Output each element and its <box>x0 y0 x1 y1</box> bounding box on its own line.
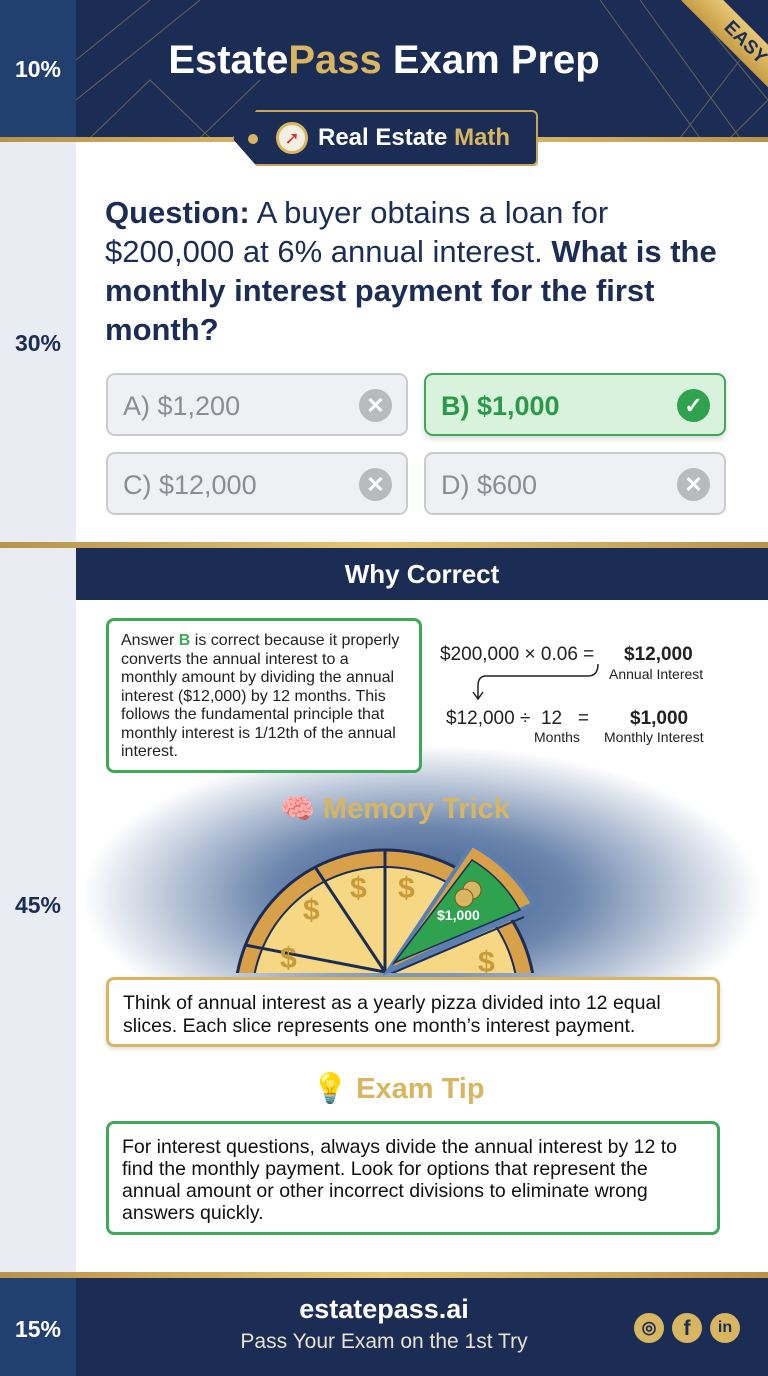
answer options <box>106 373 408 436</box>
icon: compass <box>276 122 308 154</box>
formula: Months <box>534 729 580 745</box>
pizza chart: $ <box>350 872 367 905</box>
tip box <box>106 1121 720 1235</box>
social icons <box>634 1313 740 1343</box>
text: ✓ <box>684 393 703 418</box>
badge: real estate math: Real Estate Math <box>318 124 510 151</box>
header <box>0 0 768 138</box>
green slice <box>382 842 536 976</box>
text: 10% <box>15 56 61 82</box>
footer: Pass Your Exam on the 1st Try <box>240 1330 528 1353</box>
memory trick heading: 🧠 Memory Trick <box>280 793 510 825</box>
icon: compass: ➚ <box>284 128 300 148</box>
pizza chart <box>236 848 534 973</box>
footer: estatepass.ai <box>299 1294 469 1324</box>
social icons: ◎ <box>642 1318 656 1337</box>
pizza chart: $ <box>398 872 415 905</box>
gold line <box>0 137 768 142</box>
text: 45% <box>15 892 61 918</box>
text: ✕ <box>684 472 703 497</box>
why correct heading <box>76 548 768 600</box>
title: EstatePass Exam Prep <box>168 38 600 82</box>
text: ✕ <box>366 472 385 497</box>
pizza chart: $ <box>280 942 297 975</box>
gold line <box>0 1272 768 1278</box>
text: C) $12,000 <box>123 470 257 500</box>
answer options: ✕ <box>366 393 385 418</box>
social icons: in <box>718 1319 732 1336</box>
question: Question: A buyer obtains a loan for $200,000 at 6% annual interest. What is the monthly interest payment for the first month? <box>105 195 717 347</box>
answer options: A) $1,200 <box>123 391 240 421</box>
memory gradient background <box>76 730 768 1030</box>
arrow <box>472 664 599 700</box>
gold line <box>0 542 768 548</box>
tip box: For interest questions, always divide the annual interest by 12 to find the monthly payment. Look for options that represent the annual amount or other incorrect divisions to eliminate wrong answers quickly. <box>122 1136 677 1224</box>
text: 30% <box>15 330 61 356</box>
explanation box: Answer B is correct because it properly converts the annual interest to a monthly amount by dividing the annual interest ($12,000) by 12 months. This follows the fundamental principle that monthly interest is 1/12th of the annual interest. <box>121 632 399 760</box>
text: 15% <box>15 1316 61 1342</box>
social icons: f <box>684 1317 690 1340</box>
badge: real estate math <box>232 110 538 166</box>
text: D) $600 <box>441 470 537 500</box>
why correct heading: Why Correct <box>345 559 499 589</box>
pizza text box: Think of annual interest as a yearly pizza divided into 12 equal slices. Each slice represents one month’s interest payment. <box>123 992 661 1037</box>
formula: Monthly Interest <box>604 729 704 745</box>
formula: $12,000 ÷ 12 = <box>446 708 589 729</box>
pizza chart: $ <box>478 946 495 979</box>
formula: $12,000 <box>624 644 693 665</box>
text: B) $1,000 <box>441 391 560 421</box>
formula: $1,000 <box>630 708 688 729</box>
formula: $200,000 × 0.06 = <box>440 644 594 665</box>
pizza text box <box>106 977 720 1047</box>
footer <box>0 1278 768 1376</box>
left strip <box>0 0 76 1376</box>
exam tip heading: 💡 Exam Tip <box>312 1073 485 1105</box>
formula: Annual Interest <box>609 666 703 682</box>
pizza chart: $ <box>303 894 320 927</box>
formula <box>440 644 704 745</box>
green slice: $1,000 <box>437 907 480 923</box>
